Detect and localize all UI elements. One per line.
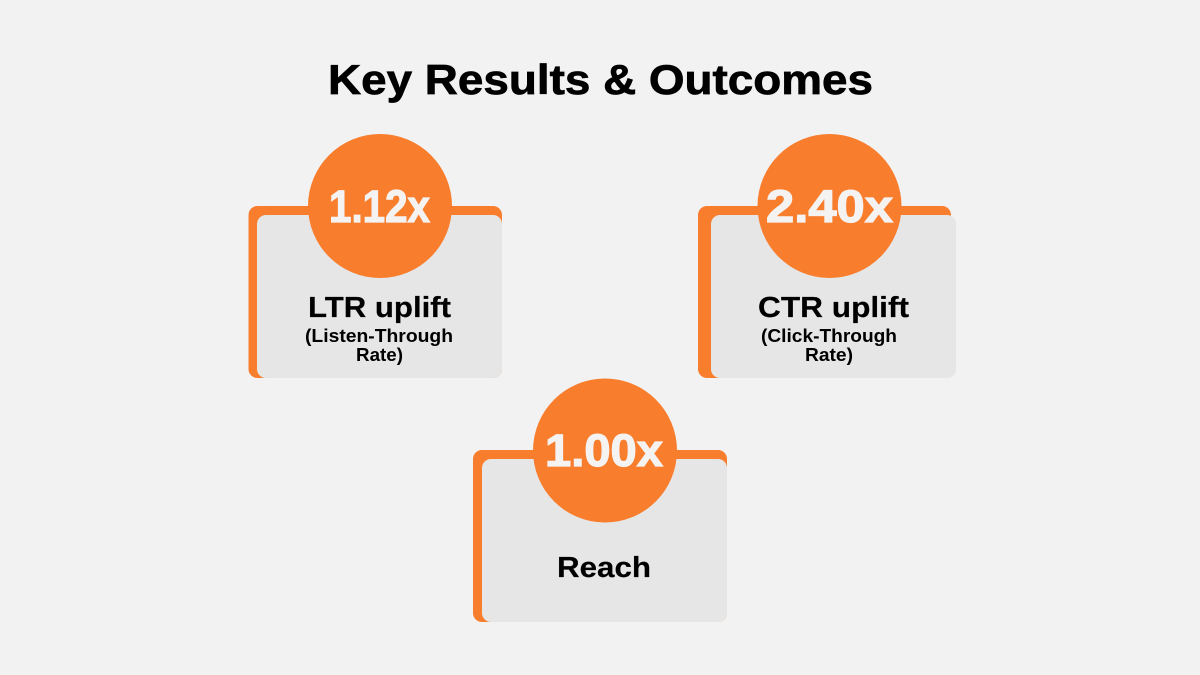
sublabel: Click-Through Rate: Rate) — [805, 345, 853, 365]
card backing: LTR — [248, 206, 502, 378]
sublabel: Click-Through Rate: (Click-Through — [761, 326, 897, 346]
value: 2.40x: 2.40x — [766, 181, 893, 232]
sublabel: Listen-Through Rate — [305, 326, 453, 365]
sublabel: Listen-Through Rate: (Listen-Through — [305, 326, 453, 346]
panel: CTR uplift — [698, 134, 956, 378]
label: CTR uplift: CTR uplift — [758, 292, 909, 324]
label: Reach: Reach — [557, 552, 651, 584]
title: Key Results & Outcomes — [328, 56, 873, 103]
panel: LTR uplift — [248, 134, 502, 378]
label: LTR uplift: LTR uplift — [308, 292, 451, 324]
card backing: CTR — [698, 206, 951, 378]
sublabel: Listen-Through Rate: Rate) — [356, 345, 403, 365]
value: 1.12x: 1.12x — [329, 181, 430, 232]
card face: Reach — [482, 459, 727, 622]
value: 1.00x: 1.00x — [545, 425, 663, 476]
card face: LTR — [257, 215, 502, 378]
sublabel: Click-Through Rate — [761, 326, 897, 365]
badge circle: CTR — [758, 134, 902, 278]
card backing: Reach — [473, 450, 727, 622]
panel: Reach — [473, 378, 727, 622]
badge circle: Reach — [533, 378, 677, 522]
badge circle: LTR — [308, 134, 452, 278]
card face: CTR — [711, 215, 956, 378]
